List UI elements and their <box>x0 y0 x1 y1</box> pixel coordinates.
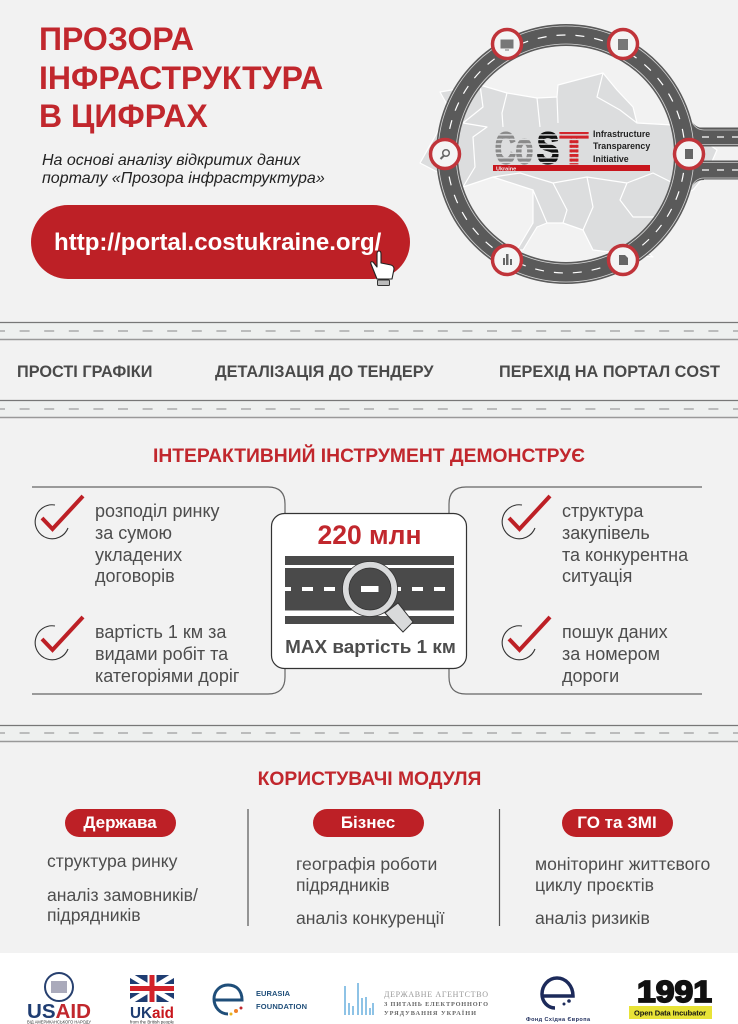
logo: 1991 Open Data Incubator <box>629 974 712 1019</box>
subtitle: На основі аналізу відкритих даних <box>42 152 301 169</box>
panel: right features <box>449 487 702 694</box>
road divider: top <box>0 322 738 340</box>
logo: 1991 Open Data Incubator: Open Data Incubator <box>634 1008 706 1018</box>
column: NGOs and media: аналіз ризиків <box>535 908 650 928</box>
value: 220 млн <box>317 520 422 550</box>
column: business: Бізнес <box>341 813 395 832</box>
text: search by road: за номером <box>562 644 660 664</box>
check icon <box>35 496 83 539</box>
column: business: географія роботи <box>296 854 437 874</box>
text: cost per km: вартість 1 км за <box>95 622 227 642</box>
column: state: структура ринку <box>47 851 178 871</box>
text: cost per km: видами робіт та <box>95 644 229 664</box>
text: market distribution <box>95 501 220 586</box>
text: procurement structure: ситуація <box>562 566 632 586</box>
icon: hand cursor <box>371 251 394 286</box>
heading: interactive tool: ІНТЕРАКТИВНИЙ ІНСТРУМЕНТ ДЕМОНСТРУЄ <box>153 443 585 467</box>
column: state: Держава <box>83 813 157 832</box>
portal link button: http://portal.costukraine.org/ <box>54 229 382 256</box>
logo: e-government agency: УРЯДУВАННЯ УКРАЇНИ <box>384 1010 476 1017</box>
CoST logo: Infrastructure <box>593 129 650 139</box>
column: business: підрядників <box>296 875 390 895</box>
logo: 1991 Open Data Incubator: 1991 <box>637 974 712 1009</box>
logo: e-government agency <box>345 983 488 1017</box>
label: MAX вартість 1 км <box>285 637 456 658</box>
column: state <box>47 809 198 925</box>
text: cost per km: категоріями доріг <box>95 666 240 686</box>
footer band <box>0 953 738 1024</box>
text: market distribution: за сумою <box>95 523 172 543</box>
text: procurement structure <box>562 501 689 586</box>
column divider <box>247 809 249 926</box>
logo: USAID <box>27 973 91 1024</box>
feature labels <box>17 363 720 381</box>
road divider: third <box>0 725 738 742</box>
road illustration <box>285 556 454 624</box>
text: market distribution: договорів <box>95 566 175 586</box>
title: ПРОЗОРА <box>39 21 194 57</box>
text: search by road: дороги <box>562 666 619 686</box>
text: market distribution: укладених <box>95 545 182 565</box>
logo: e-government agency: З ПИТАНЬ ЕЛЕКТРОННОГО <box>384 1001 488 1008</box>
panel: left features <box>32 487 285 694</box>
node: document <box>608 246 638 274</box>
logo: e-government agency: ДЕРЖАВНЕ АГЕНТСТВО <box>384 990 488 999</box>
panel: centre metric <box>272 514 466 668</box>
heading: users: КОРИСТУВАЧІ МОДУЛЯ <box>258 769 481 790</box>
icon: magnifier <box>342 562 413 632</box>
road divider: second <box>0 400 738 418</box>
node: monitor <box>492 30 522 58</box>
text: procurement structure: та конкурентна <box>562 545 689 565</box>
portal link button <box>31 205 410 279</box>
CoST logo: S <box>537 124 559 173</box>
map of Ukraine <box>420 73 717 257</box>
text: search by road <box>562 622 668 686</box>
CoST logo: Initiative <box>593 154 629 164</box>
subtitle: порталу «Прозора інфраструктура» <box>42 170 325 187</box>
logo: USAID: USAID <box>27 1000 91 1023</box>
CoST logo: Co <box>495 124 533 173</box>
logo: UKaid: UKaid <box>130 1005 174 1022</box>
logo: Eurasia Foundation: EURASIA <box>256 989 291 998</box>
logo: Eurasia Foundation <box>214 985 307 1016</box>
text: search by road: пошук даних <box>562 622 668 642</box>
check icon <box>35 617 83 660</box>
check icon <box>502 496 550 539</box>
check icon <box>502 617 550 660</box>
text: procurement structure: структура <box>562 501 644 521</box>
text: cost per km <box>95 622 240 686</box>
subtitle <box>42 152 325 187</box>
node: bar chart <box>492 246 522 274</box>
logo: East Europe Foundation: Фонд Східна Європа <box>526 1017 591 1023</box>
title: ІНФРАСТРУКТУРА <box>39 60 323 96</box>
logo: East Europe Foundation <box>526 978 591 1023</box>
road ring with side road <box>438 26 738 282</box>
CoST logo: Transparency <box>593 141 650 151</box>
feature labels: ПРОСТІ ГРАФІКИ <box>17 363 152 381</box>
node: magnifier <box>430 140 460 168</box>
CoST logo: T <box>560 124 588 173</box>
CoST logo <box>493 124 650 173</box>
column: business <box>296 809 445 928</box>
column: state: аналіз замовників/ <box>47 885 198 905</box>
node: clipboard <box>674 140 704 168</box>
column: NGOs and media: моніторинг життєвого <box>535 854 710 874</box>
feature labels: ДЕТАЛІЗАЦІЯ ДО ТЕНДЕРУ <box>215 363 434 381</box>
column: business: аналіз конкуренції <box>296 908 445 928</box>
column: state: підрядників <box>47 905 141 925</box>
logo: UKaid <box>130 975 174 1024</box>
feature labels: ПЕРЕХІД НА ПОРТАЛ COST <box>499 363 720 381</box>
node: calculator <box>608 30 638 58</box>
logo: Eurasia Foundation: FOUNDATION <box>256 1002 307 1011</box>
CoST logo: Ukraine <box>496 166 516 172</box>
column: NGOs and media <box>535 809 710 928</box>
title: В ЦИФРАХ <box>39 98 208 134</box>
column: NGOs and media: циклу проєктів <box>535 875 654 895</box>
text: procurement structure: закупівель <box>562 523 650 543</box>
text: market distribution: розподіл ринку <box>95 501 220 521</box>
title <box>39 21 323 134</box>
column: NGOs and media: ГО та ЗМІ <box>577 813 657 832</box>
column divider <box>498 809 500 926</box>
